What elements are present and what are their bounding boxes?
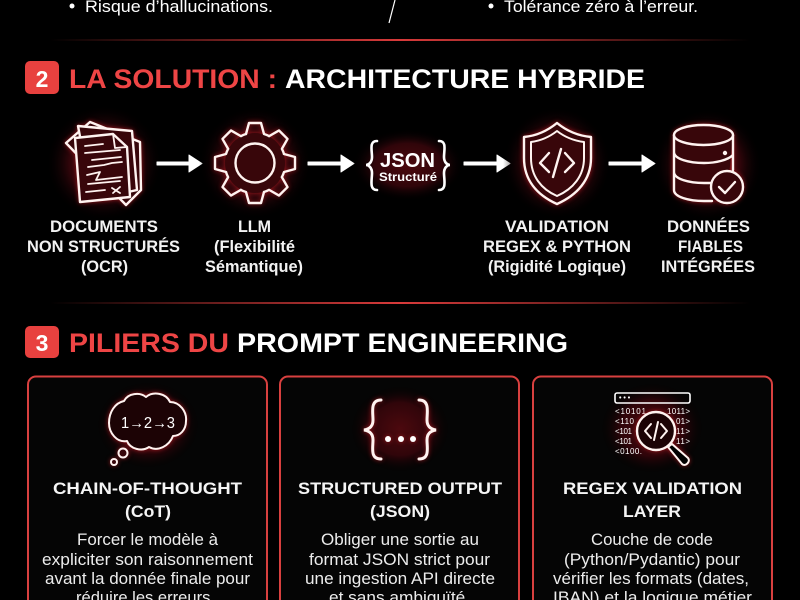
- card body: vérifier les formats (dates,: [553, 570, 749, 588]
- card body: (Python/Pydantic) pour: [564, 551, 741, 569]
- icon: code under magnifier: 11>: [676, 427, 690, 436]
- icon: code under magnifier: <101: [615, 427, 633, 436]
- card body: format JSON strict pour: [309, 551, 491, 569]
- card title: (CoT): [125, 502, 171, 521]
- icon: code under magnifier: <110: [615, 417, 635, 426]
- icon: code under magnifier: 11>: [676, 437, 690, 446]
- card title: CHAIN-OF-THOUGHT: [53, 479, 243, 498]
- icon: thought cloud: [96, 381, 200, 469]
- icon: code under magnifier: <0100.: [615, 447, 642, 456]
- label: documents: (OCR): [81, 258, 128, 276]
- icon: thought cloud: 1→2→3: [121, 415, 175, 432]
- icon: shield: [503, 107, 611, 219]
- heading: section 2: LA SOLUTION :: [69, 64, 277, 94]
- heading: section 3: [25, 326, 568, 358]
- arrow: [609, 155, 655, 172]
- label: validation: (Rigidité Logique): [488, 258, 626, 276]
- card title: [53, 479, 243, 521]
- label: documents: DOCUMENTS: [50, 218, 158, 236]
- heading: section 2: ARCHITECTURE HYBRIDE: [285, 64, 645, 94]
- card title: [298, 479, 503, 521]
- icon: code under magnifier: [600, 382, 704, 474]
- card body: Forcer le modèle à: [77, 531, 219, 549]
- card title: STRUCTURED OUTPUT: [298, 479, 503, 498]
- icon: documents: [46, 105, 162, 221]
- icon: code under magnifier: 01>: [676, 417, 690, 426]
- card title: [563, 479, 742, 521]
- label: validation: VALIDATION: [505, 218, 609, 236]
- panel: chain-of-thought: [28, 376, 267, 600]
- label: documents: NON STRUCTURÉS: [27, 237, 180, 256]
- flow diagram: hybrid architecture: [27, 105, 762, 276]
- card body: une ingestion API directe: [305, 570, 495, 588]
- heading: section 3: 3: [36, 330, 48, 356]
- icon: code under magnifier: • • •: [619, 395, 631, 402]
- panel: problem remainder: [70, 0, 698, 23]
- label: reliable data: [661, 217, 755, 276]
- label: LLM: (Flexibilité: [214, 238, 295, 256]
- arrow: [464, 155, 510, 172]
- label: LLM: [205, 218, 303, 276]
- label: reliable data: DONNÉES: [667, 217, 750, 236]
- card title: REGEX VALIDATION: [563, 479, 742, 498]
- panel: structured output: [280, 376, 519, 600]
- label: reliable data: FIABLES: [678, 238, 743, 256]
- icon: JSON structured: [352, 129, 464, 201]
- card body: [305, 531, 495, 600]
- icon: code under magnifier: <101: [615, 437, 633, 446]
- card body: [42, 531, 253, 600]
- label: documents: [27, 218, 180, 276]
- icon: code under magnifier: 1011>: [667, 407, 690, 416]
- card body: Couche de code: [591, 531, 713, 549]
- label: LLM: Sémantique): [205, 258, 303, 276]
- heading: section 3: PILIERS DU: [69, 328, 229, 358]
- panel: regex validation layer: [533, 376, 772, 600]
- arrow: [308, 155, 354, 172]
- icon: JSON structured: Structuré: [379, 170, 437, 184]
- card body: [553, 531, 753, 600]
- heading: section 2: 2: [36, 66, 48, 92]
- label: validation: REGEX & PYTHON: [483, 238, 631, 256]
- card title: (JSON): [370, 502, 430, 521]
- arrow: [157, 155, 202, 172]
- card title: LAYER: [623, 502, 681, 521]
- card body: Obliger une sortie au: [321, 531, 479, 549]
- card body: expliciter son raisonnement: [42, 551, 253, 569]
- icon: code under magnifier: <10101: [615, 407, 647, 416]
- icon: gear: [199, 107, 311, 219]
- icon: database check: [654, 109, 762, 221]
- card body: avant la donnée finale pour: [45, 570, 251, 588]
- icon: JSON structured: JSON: [380, 150, 435, 172]
- slash separator: [389, 0, 395, 23]
- heading: section 2: [25, 61, 645, 94]
- label: LLM: LLM: [238, 218, 271, 236]
- heading: section 3: PROMPT ENGINEERING: [237, 328, 568, 358]
- icon: braces with dots: [350, 385, 450, 473]
- label: reliable data: INTÉGRÉES: [661, 257, 755, 276]
- label: validation: [483, 218, 631, 276]
